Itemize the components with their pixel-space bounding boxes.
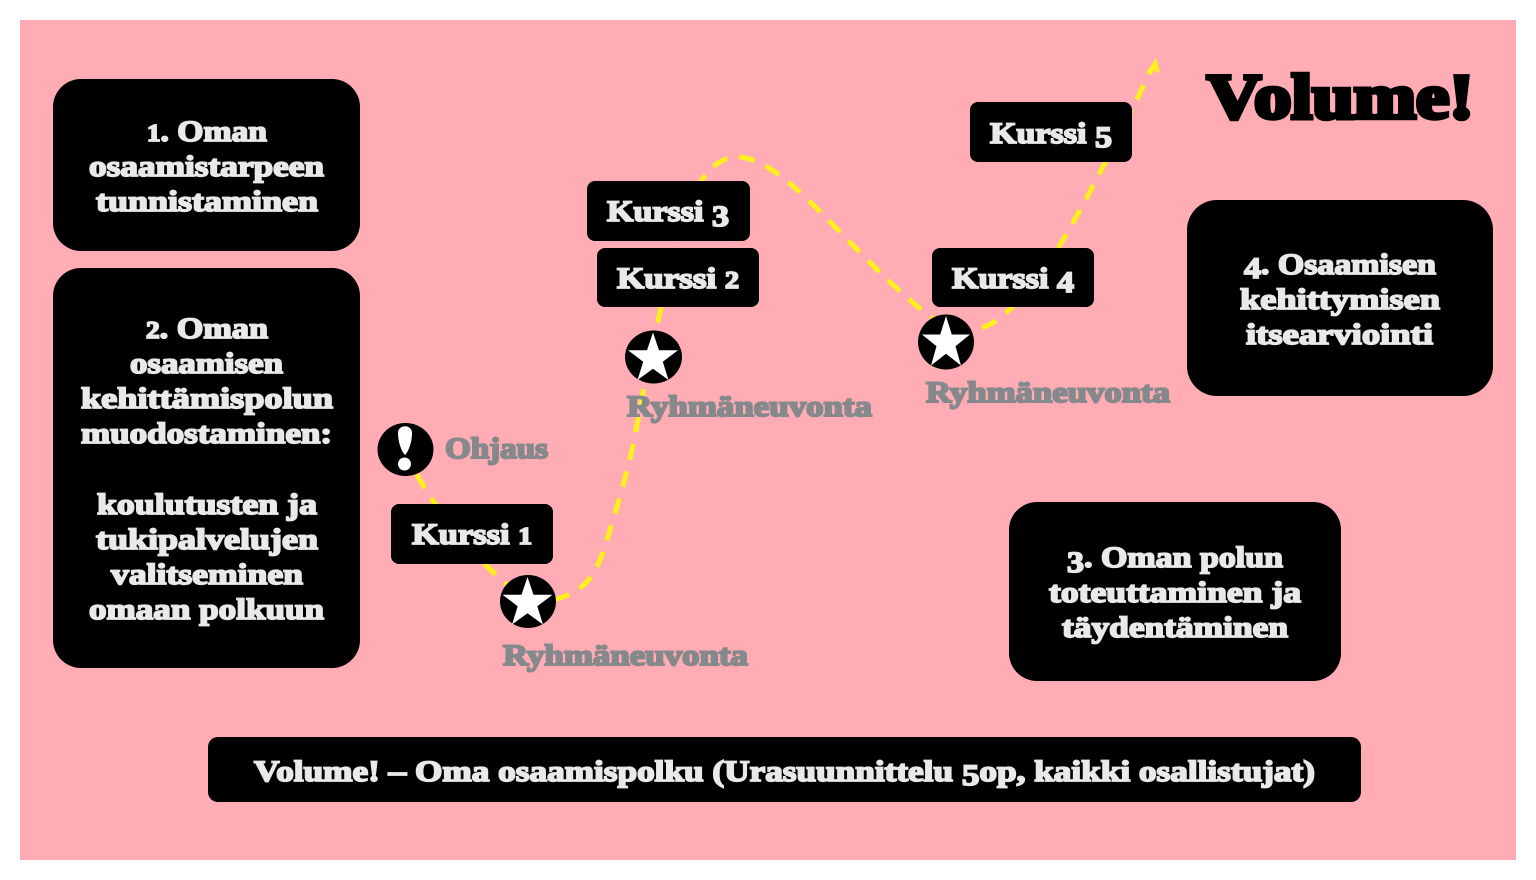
panel: step 2: koulutusten ja xyxy=(97,488,317,521)
panel: step 1: tunnistaminen xyxy=(96,185,318,218)
panel: step 1: osaamistarpeen xyxy=(89,150,324,183)
course: Kurssi 2: Kurssi 2 xyxy=(617,262,739,295)
footer banner: Volume! – Oma osaamispolku (Urasuunnittelu xyxy=(254,755,850,788)
course: Kurssi 1 xyxy=(391,504,553,564)
title: Volume! xyxy=(1207,62,1474,132)
panel: step 4: 4 xyxy=(1244,252,1261,285)
panel: step 2: kehittämispolun xyxy=(81,382,333,415)
icon: star group counselling 2 xyxy=(625,330,682,384)
course: Kurssi 4: 4 xyxy=(1057,266,1074,299)
panel: step 3: toteuttaminen ja xyxy=(1049,576,1301,609)
panel: step 4: itsearviointi xyxy=(1246,318,1433,351)
course: Kurssi 4 xyxy=(932,248,1094,307)
label: Ryhmäneuvonta 1: Ryhmäneuvonta xyxy=(503,639,748,672)
footer banner: 5 xyxy=(962,759,979,792)
course: Kurssi 3: 3 xyxy=(712,200,729,233)
footer banner xyxy=(208,737,1361,802)
panel: step 1: 1. Oman xyxy=(147,115,267,148)
course: Kurssi 5 xyxy=(970,102,1132,162)
course: Kurssi 3 xyxy=(587,181,750,241)
icon: star group counselling 1 xyxy=(500,575,556,628)
course: Kurssi 5: 5 xyxy=(1095,121,1112,154)
panel: step 4: kehittymisen xyxy=(1240,283,1440,316)
panel: step 3: . Oman polun xyxy=(1084,541,1283,574)
panel: step 2: 2. Oman xyxy=(146,312,268,345)
label: Ryhmäneuvonta 3: Ryhmäneuvonta xyxy=(926,376,1170,409)
panel: step 3 xyxy=(1009,502,1341,681)
course: Kurssi 4: Kurssi xyxy=(952,262,1037,295)
course: Kurssi 2 xyxy=(597,248,759,307)
panel: step 3: 3 xyxy=(1067,546,1084,579)
panel: step 2: osaamisen xyxy=(130,347,283,380)
panel: step 2: valitseminen xyxy=(111,558,303,591)
panel: step 4 xyxy=(1187,200,1493,396)
panel: step 2: omaan polkuun xyxy=(89,593,324,626)
panel: step 4: . Osaamisen xyxy=(1261,248,1436,281)
footer banner: op, kaikki osallistujat) xyxy=(979,755,1315,788)
course: Kurssi 5: Kurssi xyxy=(990,117,1075,150)
panel: step 3: täydentäminen xyxy=(1062,611,1288,644)
icon: star group counselling 3 xyxy=(918,314,974,370)
course: Kurssi 1: Kurssi 1 xyxy=(412,518,532,551)
dashed path arrow xyxy=(405,58,1160,601)
panel: step 2: muodostaminen: xyxy=(81,417,332,450)
panel: step 2: tukipalvelujen xyxy=(96,523,318,556)
panel: step 1 xyxy=(53,79,360,251)
label: Ryhmäneuvonta 2: Ryhmäneuvonta xyxy=(627,390,872,423)
label: Ohjaus: Ohjaus xyxy=(445,432,548,465)
panel: step 2 xyxy=(53,268,360,668)
icon: guidance exclamation xyxy=(378,423,434,476)
course: Kurssi 3: Kurssi xyxy=(607,195,692,228)
